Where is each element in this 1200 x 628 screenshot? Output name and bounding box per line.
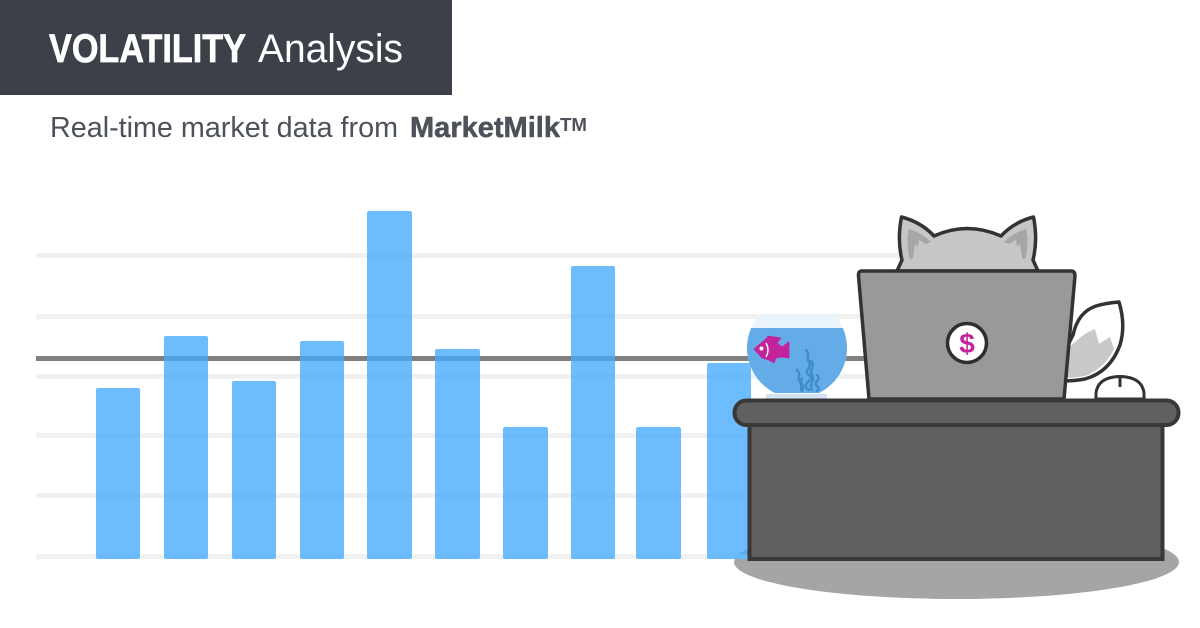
icon: seaweed [797,350,818,391]
icon: dollar logo: $ [959,328,975,359]
fishbowl [747,314,847,398]
bar chart [36,211,900,559]
left inner ear [908,229,931,259]
computer mouse [1096,376,1144,399]
title banner [0,0,452,95]
desk [734,400,1178,559]
subtitle: MarketMilk [410,112,561,144]
cat head with ears [897,217,1038,271]
bars [96,211,751,559]
subtitle: TM [560,115,587,135]
subtitle: Real-time market data from [50,112,398,144]
icon: pink fish [754,336,789,363]
right inner ear [1004,229,1028,259]
cat tail [1060,302,1123,381]
icon: dollar logo [948,324,986,362]
title text: volatility analysis: VOLATILITY [49,27,246,71]
average line [36,356,866,361]
laptop [858,271,1075,399]
desk shadow [734,525,1179,599]
title text: volatility analysis: Analysis [258,27,403,71]
